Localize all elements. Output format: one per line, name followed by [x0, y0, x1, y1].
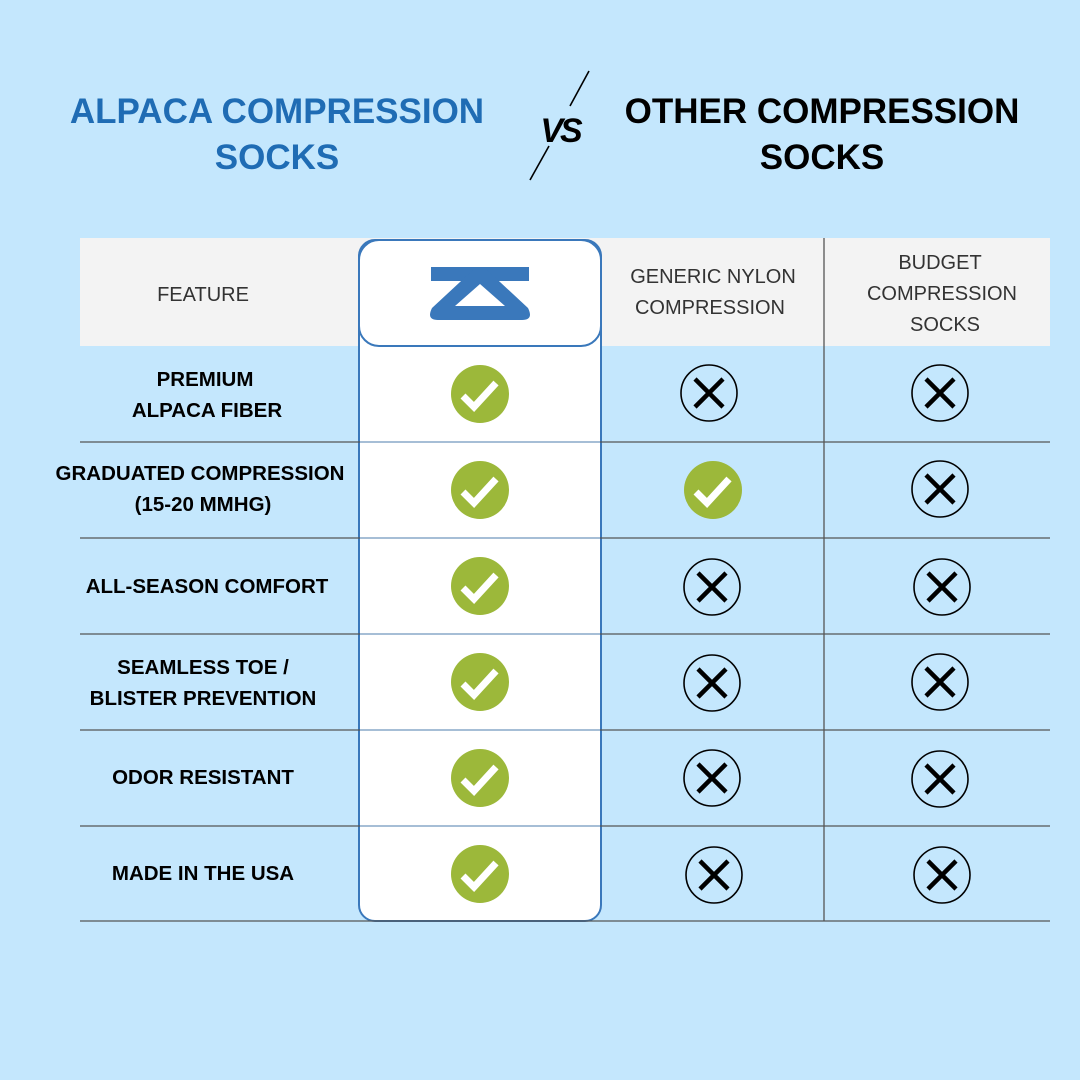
header row background — [80, 238, 1050, 346]
feature labels: BLISTER PREVENTION — [90, 687, 316, 710]
feature labels: PREMIUM — [157, 368, 253, 391]
generic nylon icons — [681, 365, 742, 903]
column headers: BUDGET — [898, 252, 982, 274]
checks alpaca — [451, 365, 509, 903]
feature labels: ALL-SEASON COMFORT — [86, 575, 329, 598]
feature labels: ALPACA FIBER — [132, 399, 282, 422]
column headers: COMPRESSION — [867, 283, 1017, 305]
feature labels — [56, 368, 344, 885]
column headers: GENERIC NYLON — [630, 266, 796, 288]
feature labels: SEAMLESS TOE / — [117, 656, 289, 679]
vs mark — [530, 71, 589, 180]
icon: logo — [430, 267, 530, 320]
budget icons — [912, 365, 970, 903]
feature labels: MADE IN THE USA — [112, 862, 294, 885]
vs mark: VS — [540, 112, 583, 150]
column headers — [157, 252, 1017, 336]
feature labels: (15-20 MMHG) — [135, 493, 271, 516]
alpaca column — [359, 240, 601, 921]
feature labels: GRADUATED COMPRESSION — [56, 462, 344, 485]
title: others: OTHER COMPRESSION — [625, 92, 1019, 131]
title: others: SOCKS — [760, 138, 884, 177]
grid lines — [80, 238, 1050, 921]
column headers: FEATURE — [157, 284, 249, 306]
column headers: SOCKS — [910, 314, 980, 336]
title: others — [625, 92, 1019, 177]
title: alpaca: ALPACA COMPRESSION — [70, 92, 484, 131]
title: alpaca — [70, 92, 484, 177]
column headers: COMPRESSION — [635, 297, 785, 319]
title: alpaca: SOCKS — [215, 138, 339, 177]
feature labels: ODOR RESISTANT — [112, 766, 294, 789]
